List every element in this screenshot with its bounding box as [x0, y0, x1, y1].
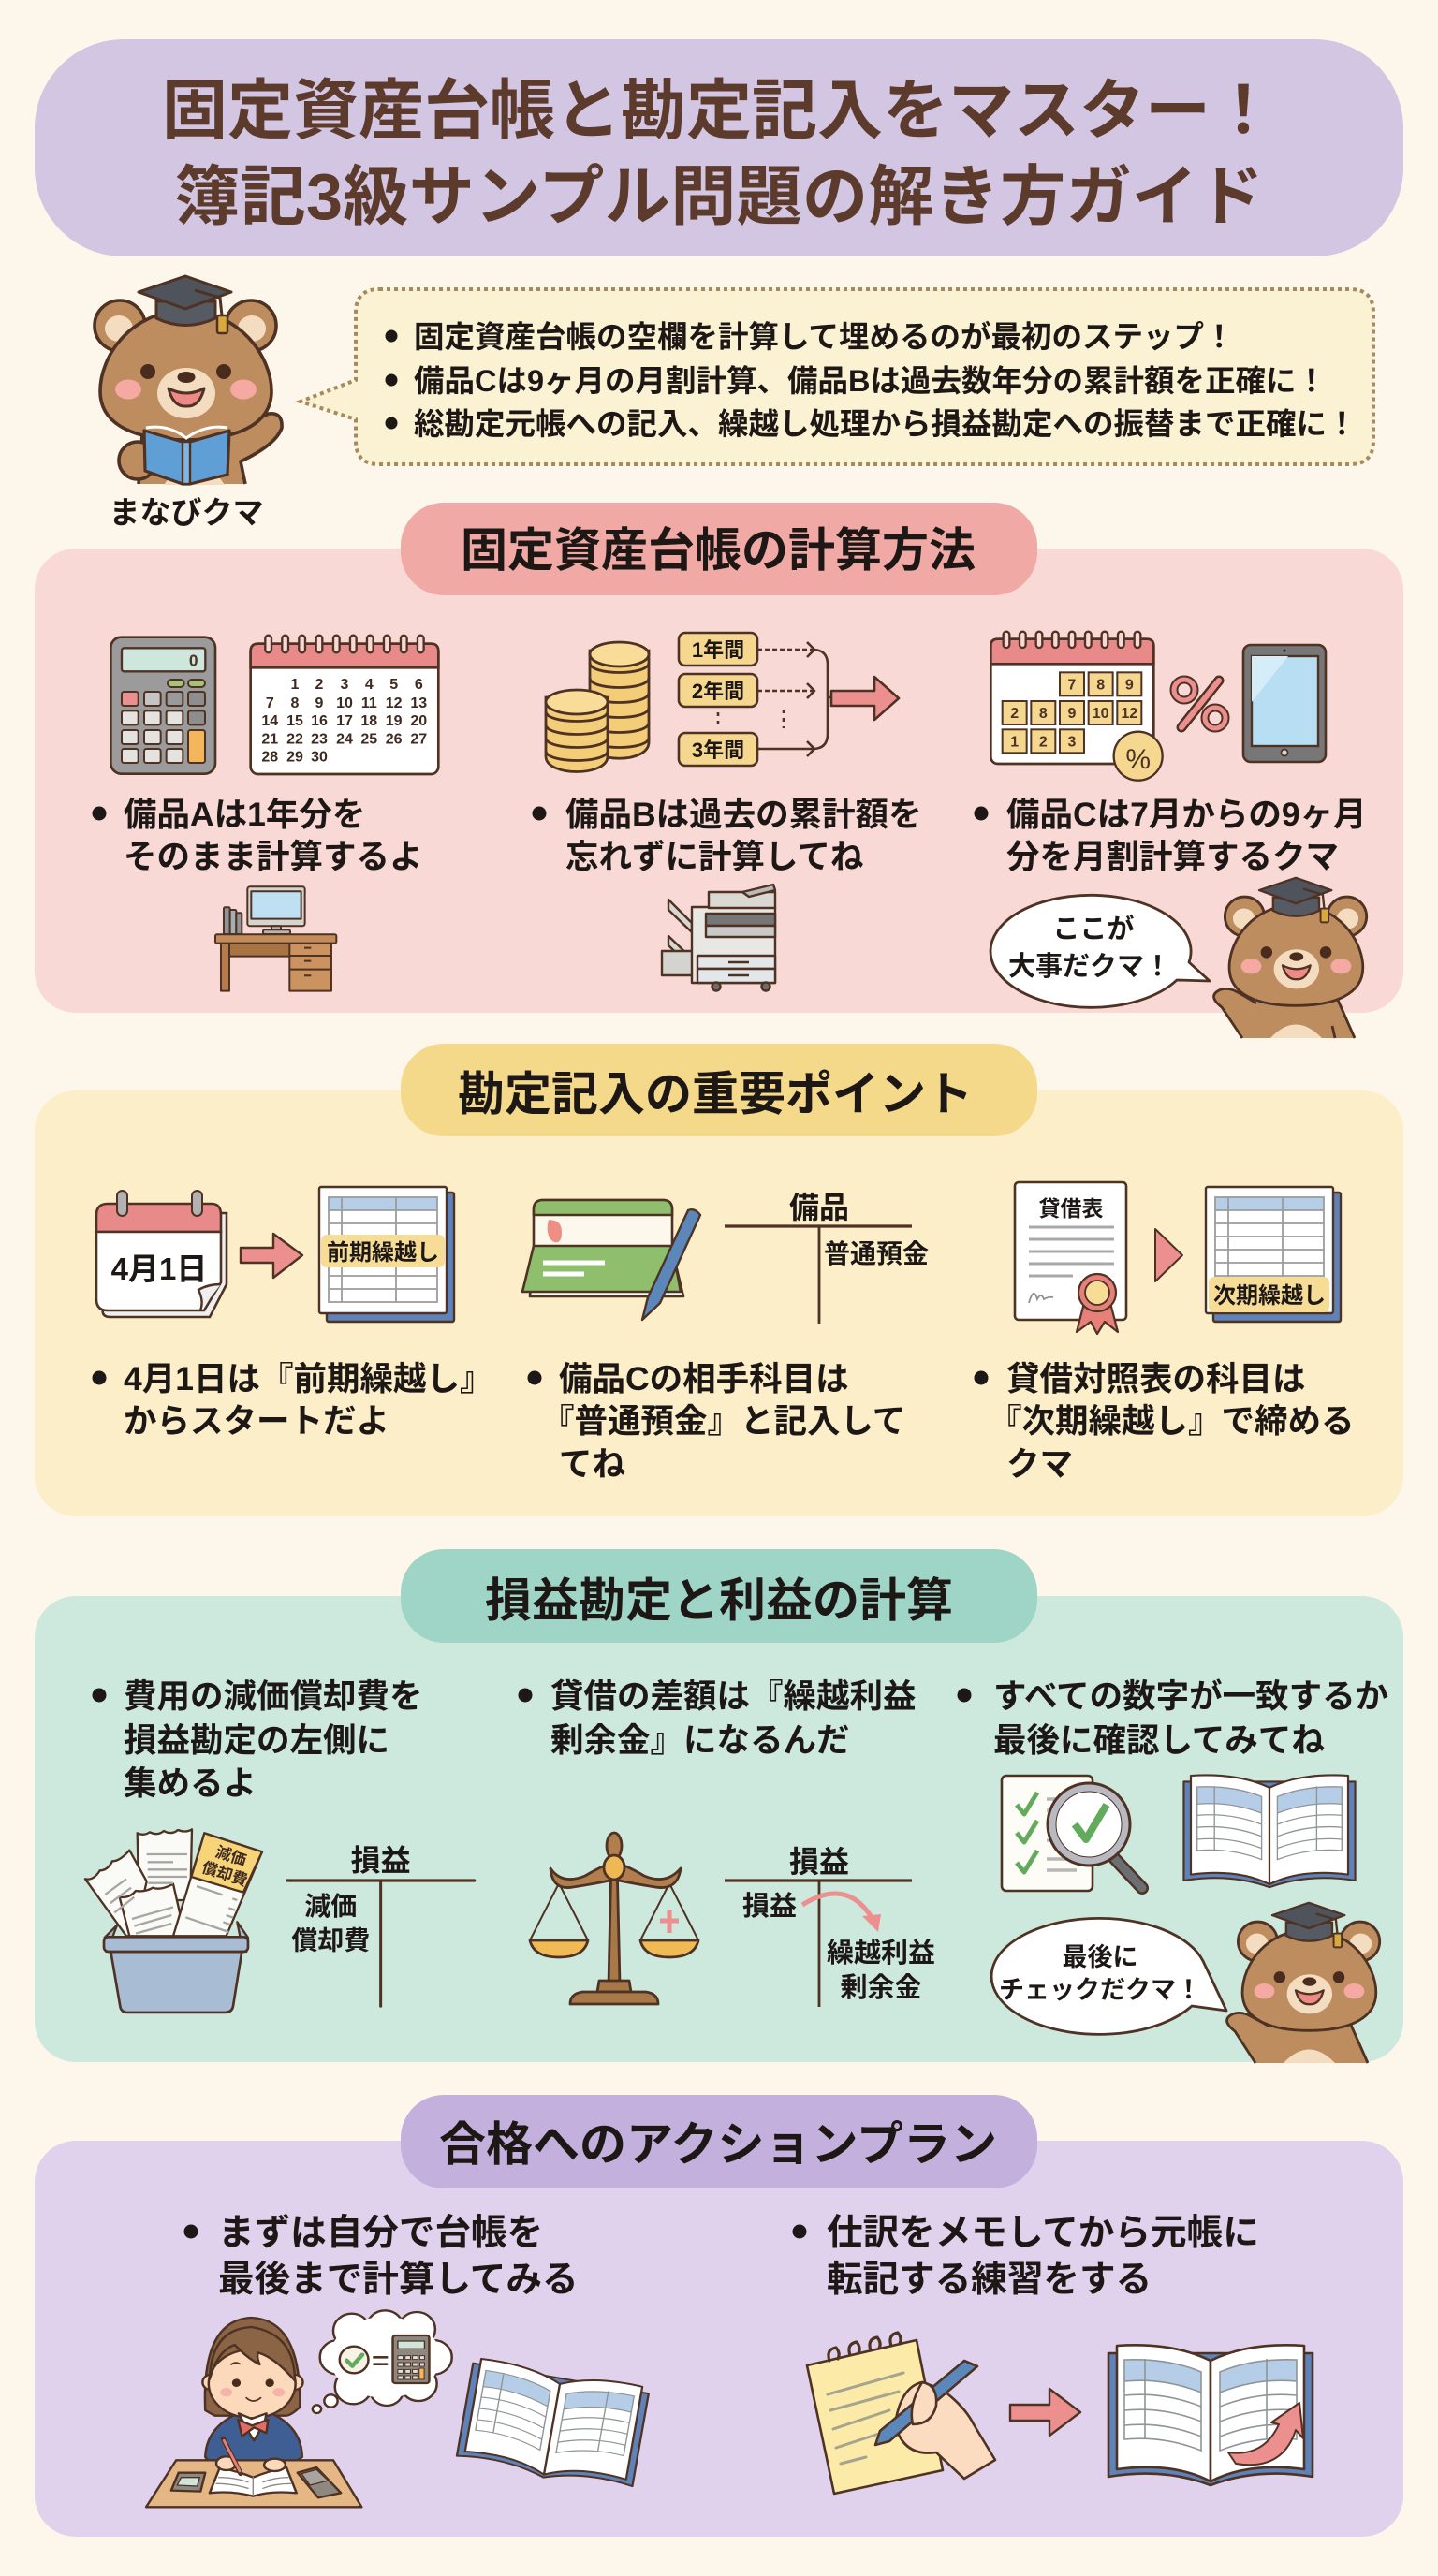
heading: 合格へのアクションプラン: 合格へのアクションプラン [439, 2118, 997, 2171]
icon: year calendar: 13 [410, 695, 427, 711]
text: 次期繰越し: 貸借対照表の科目は [1006, 1360, 1306, 1398]
text: 繰越利益剰余金 [519, 1677, 917, 1759]
icon: year calendar: 9 [315, 695, 324, 711]
icon: percent sign [1174, 680, 1225, 728]
text: 次期繰越し: クマ [1006, 1445, 1073, 1483]
heading: 勘定記入の重要ポイント: 勘定記入の重要ポイント [458, 1068, 973, 1120]
T-account: 損益 left: 損益 [351, 1843, 411, 1877]
text: 減価償却費 [92, 1677, 423, 1802]
icon: year calendar: 22 [286, 731, 303, 747]
T-account: 備品: 備品 [789, 1191, 849, 1224]
speech bubble: 最後にチェックだクマ: 最後に [1062, 1943, 1138, 1971]
panel: 勘定記入の重要ポイント [35, 1090, 1403, 1516]
icon: year calendar: 30 [311, 749, 328, 765]
icon: year calendar: 21 [261, 731, 278, 747]
icon: calendar with months: 1 [1010, 734, 1019, 750]
diagram: yearly amounts flow to arrow [679, 633, 899, 766]
title banner [35, 39, 1403, 256]
icon: year calendar: 11 [361, 695, 377, 711]
icon: year calendar: 20 [410, 713, 427, 729]
callout: key points bubble [301, 289, 1373, 464]
T-account: 損益 right: 繰越利益 [827, 1938, 935, 1969]
text: 普通預金 [528, 1360, 905, 1483]
icon: balance scale [530, 1833, 698, 2004]
icon: year calendar: 2 [315, 677, 324, 693]
heading: 固定資産台帳の計算方法 [401, 503, 1037, 595]
icon: year calendar: 15 [286, 713, 303, 729]
T-account: 備品 [725, 1191, 929, 1324]
icon: calendar 4月1日: 4月1日 [111, 1251, 207, 1286]
text: 数字の確認: 最後に確認してみてね [993, 1721, 1325, 1759]
icon: tablet [1243, 645, 1326, 762]
text: 備品C: 備品Cは7月からの9ヶ月 [1006, 796, 1367, 833]
text: 繰越利益剰余金: 貸借の差額は『繰越利益 [550, 1677, 917, 1715]
diagram: yearly amounts flow to arrow: 1年間 [692, 638, 744, 662]
icon: coin stacks [546, 642, 649, 771]
icon: desk with computer [215, 886, 336, 991]
diagram: yearly amounts flow to arrow: 2年間 [692, 680, 744, 703]
icon: calendar 4月1日 [96, 1191, 227, 1317]
text: 普通預金: てね [559, 1445, 626, 1483]
panel: 損益勘定と利益の計算 [35, 1596, 1403, 2062]
illustration: student at desk with thought bubble [146, 2310, 650, 2507]
speech bubble: ここが大事だクマ [990, 895, 1210, 1007]
text: 数字の確認 [957, 1677, 1388, 1759]
text: 備品A [92, 796, 423, 875]
text: 備品C: 分を月割計算するクマ [1006, 838, 1339, 875]
heading: 損益勘定と利益の計算: 損益勘定と利益の計算 [485, 1574, 953, 1627]
T-account: 損益 right: 剰余金 [840, 1972, 922, 2003]
arrow: triangle [1155, 1229, 1182, 1281]
icon: year calendar: 17 [336, 713, 353, 729]
speech bubble: 最後にチェックだクマ: チェックだクマ！ [999, 1976, 1201, 2004]
mascot: waving bear checking [1227, 1903, 1380, 2063]
icon: calculator [110, 637, 215, 774]
text: 繰越利益剰余金: 剰余金』になるんだ [550, 1721, 850, 1759]
icon: open ledger [1183, 1775, 1356, 1887]
icon: balance sheet document: 貸借表 [1039, 1196, 1103, 1221]
icon: basket of receipts: 償却費 [199, 1858, 250, 1890]
text: 普通預金: 『普通預金』と記入して [541, 1402, 905, 1440]
illustration: notepad with hand and pen [807, 2333, 995, 2494]
text: 備品B: 忘れずに計算してね [565, 838, 864, 875]
icon: year calendar: 19 [386, 713, 403, 729]
text: 元帳に転記 [792, 2213, 1259, 2300]
callout: key points bubble: 総勘定元帳への記入、繰越し処理から損益勘定への振替まで正確に！ [414, 407, 1357, 441]
panel: 固定資産台帳の計算方法 [35, 549, 1403, 1013]
icon: calendar with months: 2 [1010, 706, 1019, 722]
icon: calendar with months: 8 [1039, 706, 1048, 722]
callout: key points bubble: 固定資産台帳の空欄を計算して埋めるのが最初のステップ！ [414, 319, 1235, 354]
T-account: 備品: 普通預金 [824, 1239, 929, 1268]
icon: basket of receipts: 減価 [213, 1843, 248, 1869]
icon: calendar with months: 12 [1121, 706, 1137, 722]
icon: basket of receipts [85, 1829, 262, 2012]
mascot: まなびクマ with book: まなびクマ [109, 495, 264, 530]
text: 減価償却費: 費用の減価償却費を [124, 1677, 423, 1715]
speech bubble: ここが大事だクマ: 大事だクマ！ [1008, 951, 1171, 982]
icon: passbook and pen [522, 1200, 700, 1320]
icon: calendar with months: 9 [1068, 706, 1077, 722]
icon: year calendar: 24 [336, 731, 353, 747]
text: 自分で計算: 最後まで計算してみる [218, 2260, 579, 2300]
icon: open ledger with posting arrow [1108, 2345, 1313, 2485]
icon: ledger 前期繰越し [319, 1187, 454, 1322]
icon: year calendar: 4 [365, 677, 374, 693]
text: 自分で計算: まずは自分で台帳を [218, 2213, 543, 2253]
text: 減価償却費: 損益勘定の左側に [124, 1721, 389, 1759]
speech bubble: ここが大事だクマ: ここが [1052, 913, 1135, 944]
text: 次期繰越し [974, 1360, 1355, 1483]
icon: year calendar: 12 [386, 695, 403, 711]
text: 普通預金: 備品Cの相手科目は [559, 1360, 849, 1398]
text: 前期繰越し [92, 1360, 492, 1440]
icon: year calendar: 27 [410, 731, 427, 747]
arrow [241, 1234, 302, 1278]
T-account: 損益 left: 減価 [304, 1892, 357, 1921]
title banner: 固定資産台帳と勘定記入をマスター！ [162, 74, 1276, 147]
heading: 勘定記入の重要ポイント [401, 1044, 1037, 1136]
icon: calendar with months: 7 [1068, 677, 1077, 693]
heading: 合格へのアクションプラン [401, 2095, 1037, 2188]
icon: year calendar: 28 [261, 749, 278, 765]
icon: balance sheet document [1015, 1182, 1126, 1334]
text: 前期繰越し: 4月1日は『前期繰越し』 [124, 1360, 492, 1398]
icon: year calendar: 7 [266, 695, 274, 711]
panel: 合格へのアクションプラン [35, 2141, 1403, 2537]
icon: calculator: 0 [189, 651, 198, 670]
T-account: 損益 right [725, 1845, 935, 2007]
icon: calendar with months: 2 [1039, 734, 1048, 750]
text: 数字の確認: すべての数字が一致するか [993, 1677, 1388, 1715]
text: 備品A: 備品Aは1年分を [124, 796, 365, 833]
arrow [1010, 2389, 1080, 2436]
title banner: 簿記3級サンプル問題の解き方ガイド [174, 160, 1264, 233]
text: 備品B: 備品Bは過去の累計額を [565, 796, 922, 833]
text: 備品A: そのまま計算するよ [124, 838, 423, 875]
icon: calendar with months [990, 632, 1163, 781]
icon: year calendar: 6 [415, 677, 423, 693]
icon: checklist with magnifier [1002, 1776, 1142, 1891]
icon: year calendar: 5 [389, 677, 398, 693]
icon: year calendar: 16 [311, 713, 328, 729]
icon: calendar with months: 9 [1125, 677, 1134, 693]
icon: year calendar: 25 [360, 731, 377, 747]
icon: calendar with months: % [1125, 744, 1151, 775]
icon: year calendar: 1 [291, 677, 300, 693]
icon: ledger 次期繰越し [1206, 1187, 1341, 1322]
text: 自分で計算 [183, 2213, 579, 2300]
icon: calendar with months: 10 [1093, 706, 1109, 722]
heading: 損益勘定と利益の計算 [401, 1549, 1037, 1643]
icon: year calendar [251, 636, 438, 774]
icon: year calendar: 26 [386, 731, 403, 747]
text: 次期繰越し: 『次期繰越し』で締める [989, 1402, 1355, 1440]
icon: year calendar: 29 [286, 749, 303, 765]
icon: calendar with months: 8 [1096, 677, 1105, 693]
T-account: 損益 right: 損益 [742, 1891, 797, 1922]
icon: year calendar: 18 [360, 713, 377, 729]
icon: ledger 次期繰越し: 次期繰越し [1213, 1283, 1326, 1309]
diagram: yearly amounts flow to arrow: 3年間 [692, 739, 744, 762]
speech bubble: 最後にチェックだクマ [991, 1918, 1226, 2034]
text: 元帳に転記: 転記する練習をする [827, 2260, 1152, 2300]
text: 備品B [532, 796, 922, 875]
text: 前期繰越し: からスタートだよ [124, 1402, 389, 1440]
icon: year calendar: 3 [341, 677, 349, 693]
callout: key points bubble: 備品Cは9ヶ月の月割計算、備品Bは過去数年分の累計額を正確に！ [414, 364, 1327, 398]
mascot: waving bear [1214, 878, 1367, 1038]
icon: ledger 前期繰越し: 前期繰越し [327, 1240, 439, 1266]
text: 元帳に転記: 仕訳をメモしてから元帳に [827, 2213, 1259, 2253]
T-account: 損益 left [287, 1843, 475, 2006]
icon: copier [662, 885, 775, 990]
T-account: 損益 left: 償却費 [291, 1926, 370, 1955]
T-account: 損益 right: 損益 [789, 1845, 849, 1879]
icon: year calendar: 23 [311, 731, 328, 747]
mascot: まなびクマ with book [95, 276, 282, 530]
text: 減価償却費: 集めるよ [124, 1764, 257, 1802]
heading: 固定資産台帳の計算方法: 固定資産台帳の計算方法 [461, 524, 976, 577]
icon: year calendar: 10 [336, 695, 353, 711]
icon: calendar with months: 3 [1068, 734, 1077, 750]
text: 備品C [974, 796, 1367, 875]
icon: year calendar: 8 [291, 695, 300, 711]
icon: year calendar: 14 [261, 713, 278, 729]
